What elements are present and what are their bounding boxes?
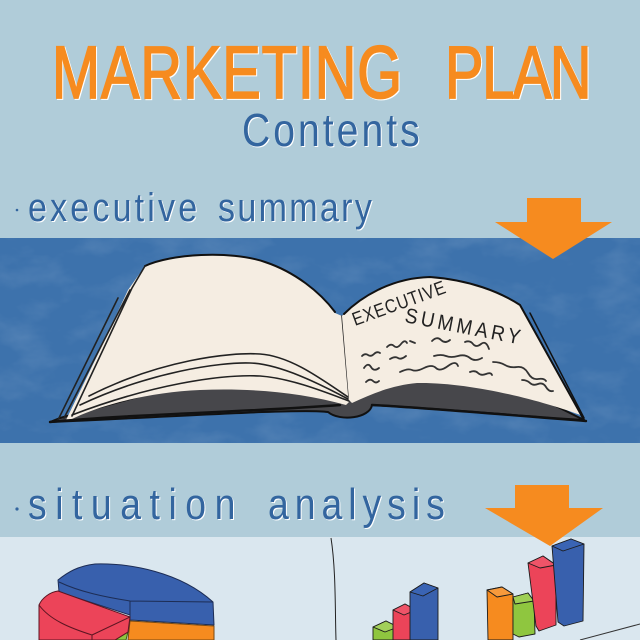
heading: situation analysis xyxy=(15,479,446,530)
title: PLAN xyxy=(445,32,592,115)
title: MARKETING xyxy=(52,32,402,115)
pie slice: orange xyxy=(128,621,214,640)
heading: situation analysis: situation xyxy=(29,480,236,530)
heading: situation analysis: analysis xyxy=(269,480,446,530)
bar: green xyxy=(373,621,398,640)
pie slice: green xyxy=(115,632,128,640)
heading: executive summary: summary xyxy=(219,185,373,231)
panel: blue book band xyxy=(0,238,640,443)
heading: executive summary: summary xyxy=(218,184,372,230)
subtitle: contents: Contents xyxy=(243,106,421,158)
pie chart xyxy=(39,564,214,640)
title: MARKETING xyxy=(53,33,403,116)
pie slice: red xyxy=(39,591,130,640)
title: PLAN xyxy=(446,33,593,116)
left page edges xyxy=(58,266,349,420)
book cover shadow xyxy=(50,375,584,422)
title xyxy=(52,32,593,116)
bar chart: small xyxy=(373,583,438,640)
book page text: executive summary: SUMMARY xyxy=(403,304,522,349)
arrow: executive summary xyxy=(495,198,612,259)
book page text: executive summary xyxy=(349,276,522,349)
bar: blue xyxy=(552,539,584,626)
left page xyxy=(66,255,349,420)
icon: open book xyxy=(50,255,586,422)
heading: situation analysis: situation xyxy=(28,479,235,529)
right page xyxy=(342,277,583,416)
bar: red xyxy=(528,556,556,631)
heading: executive summary xyxy=(16,184,373,231)
bar chart: large xyxy=(487,539,584,640)
bar: red xyxy=(393,604,416,640)
book page squiggles xyxy=(362,338,553,391)
bar: orange xyxy=(487,587,513,640)
arrow: situation analysis xyxy=(485,485,603,546)
bar: blue xyxy=(410,583,438,640)
book page text: executive summary: EXECUTIVE xyxy=(349,276,448,330)
bar: green xyxy=(513,593,535,637)
subtitle: contents: Contents xyxy=(242,105,420,157)
heading: situation analysis: analysis xyxy=(268,479,445,529)
pie slice: blue xyxy=(58,564,214,625)
panel: charts area xyxy=(0,537,640,640)
heading: executive summary: executive xyxy=(29,185,198,231)
heading: executive summary: executive xyxy=(28,184,197,230)
